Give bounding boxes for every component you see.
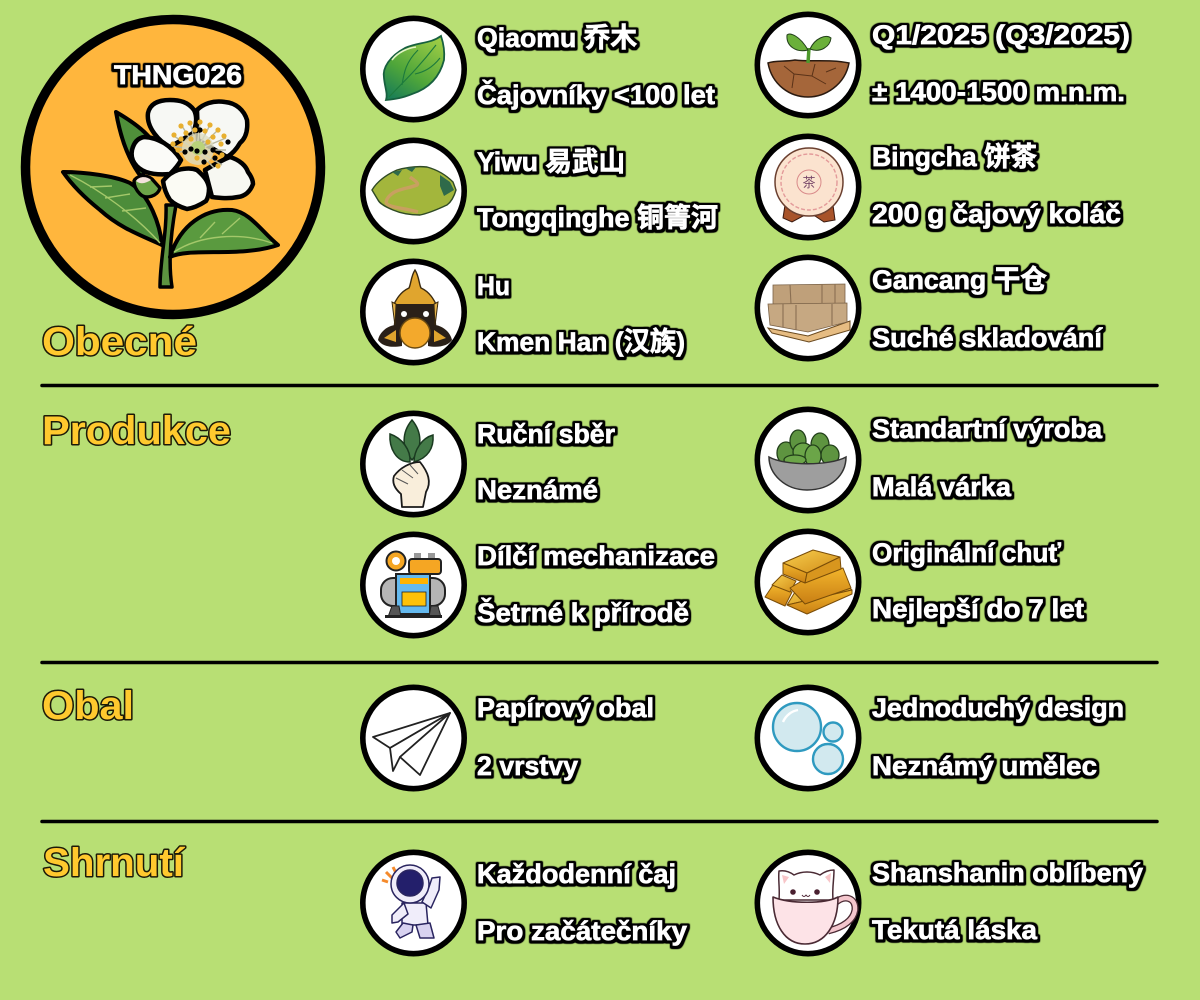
text: Ruční sběr <box>477 419 615 449</box>
item: hand picking <box>363 413 615 515</box>
item: wrapper <box>363 687 654 789</box>
text: Čajovníky <100 let <box>477 79 715 110</box>
icon: hand holding leaves <box>390 420 433 507</box>
text: Originální chuť <box>872 538 1061 568</box>
text <box>872 538 1084 624</box>
item: origin <box>363 140 718 242</box>
item: tea shape <box>757 136 1121 238</box>
icon: cat in cup <box>773 870 855 944</box>
text: Kmen Han (汉族) <box>477 327 685 357</box>
text: Dílčí mechanizace <box>477 541 715 571</box>
text: Bingcha 饼茶 <box>872 142 1037 172</box>
text: Tekutá láska <box>872 915 1038 945</box>
text: Neznámé <box>477 475 598 505</box>
text <box>477 859 687 946</box>
text <box>477 271 685 357</box>
item: ethnic group <box>363 261 685 363</box>
item: processing <box>757 409 1103 511</box>
text: ± 1400-1500 m.n.m. <box>872 77 1125 107</box>
text: Gancang 干仓 <box>872 265 1047 295</box>
item: favourite <box>757 852 1143 954</box>
item: design <box>757 687 1124 789</box>
text <box>477 23 715 110</box>
text: Malá várka <box>872 472 1012 502</box>
icon: bubbles <box>773 703 843 774</box>
text: Yiwu 易武山 <box>477 147 625 177</box>
heading: Obal: Obal <box>42 684 134 728</box>
icon: boxes on pallet <box>768 284 850 342</box>
item: mechanisation <box>363 534 715 636</box>
icon: leaf <box>384 36 444 100</box>
text: Pro začátečníky <box>477 916 687 946</box>
icon: mountain map <box>372 167 456 215</box>
text: Jednoduchý design <box>872 693 1124 723</box>
text: Každodenní čaj <box>477 859 676 889</box>
text <box>872 265 1104 353</box>
text: Q1/2025 (Q3/2025) <box>872 20 1130 50</box>
item: tree type <box>363 18 715 120</box>
icon: paper plane <box>373 713 450 775</box>
text <box>477 541 715 628</box>
heading: Obecné: Obecné <box>42 320 197 364</box>
icon: tea flower <box>63 100 278 287</box>
text <box>477 147 718 233</box>
icon: guardian figure <box>378 270 452 348</box>
text: Qiaomu 乔木 <box>477 23 637 53</box>
icon: bowl of leaves <box>769 430 846 490</box>
text: Tongqinghe 铜箐河 <box>477 203 718 233</box>
text <box>477 419 615 505</box>
text <box>872 693 1124 781</box>
text <box>872 142 1121 229</box>
text: 2 vrstvy <box>477 751 578 781</box>
text: 200 g čajový koláč <box>872 199 1121 229</box>
text: Neznámý umělec <box>872 751 1097 781</box>
text: Shanshanin oblíbený <box>872 858 1143 888</box>
icon: tea cake on stand: 茶 <box>802 172 816 191</box>
text <box>872 414 1103 502</box>
text: Hu <box>477 271 510 301</box>
icon: gold bars <box>765 550 852 614</box>
product code: THNG026 <box>114 60 242 90</box>
icon: astronaut <box>382 865 440 938</box>
icon: tea cake on stand <box>775 148 843 222</box>
text: Nejlepší do 7 let <box>872 594 1084 624</box>
item: storage <box>757 257 1104 359</box>
item: harvest date and altitude <box>757 14 1130 116</box>
text: Šetrné k přírodě <box>477 597 689 628</box>
text: Suché skladování <box>872 323 1104 353</box>
text <box>477 693 654 781</box>
item: daily tea <box>363 852 687 954</box>
text: Standartní výroba <box>872 414 1103 444</box>
panel: main tea flower badge <box>26 20 320 314</box>
text: Papírový obal <box>477 693 654 723</box>
icon: seedling <box>768 34 849 97</box>
heading: Produkce: Produkce <box>42 409 231 453</box>
item: taste and ageing <box>757 531 1084 633</box>
text <box>872 20 1130 107</box>
text <box>872 858 1143 945</box>
icon: machine <box>381 552 445 618</box>
heading: Shrnutí: Shrnutí <box>43 841 186 885</box>
